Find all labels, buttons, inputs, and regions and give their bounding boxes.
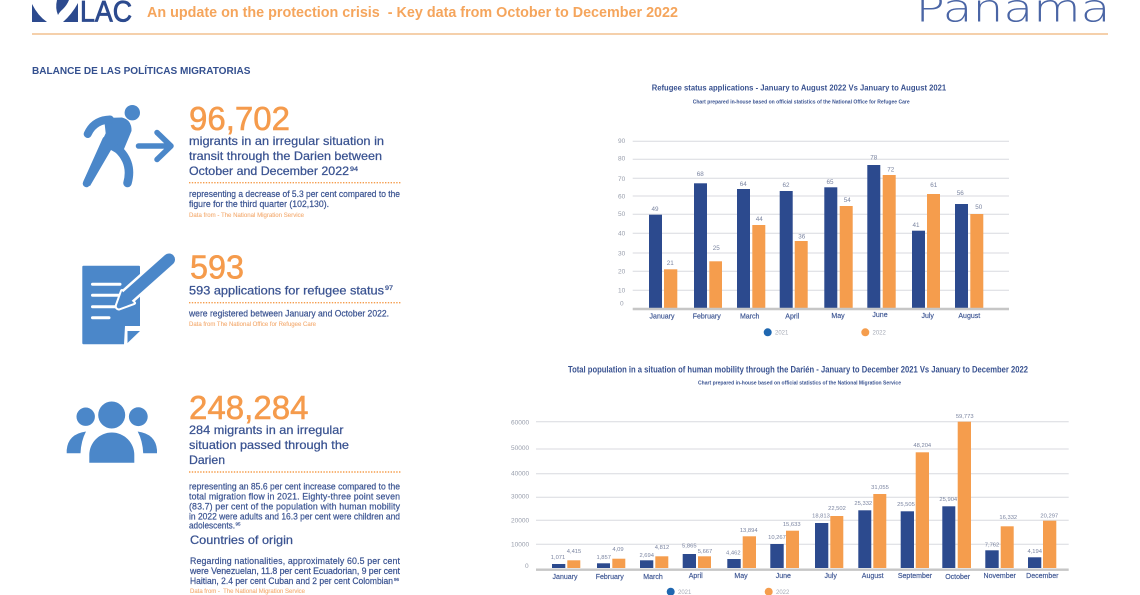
icon: group of people (67, 402, 157, 463)
header title: An update on the protection crisis - Key data from October to December 2022 (147, 5, 678, 21)
header rule (32, 33, 1108, 35)
chart title: Refugee status applications - January to August 2022 Vs January to August 2021 (652, 84, 947, 92)
y axis labels: 40000 (511, 470, 529, 477)
value labels: 4,812 (655, 545, 669, 551)
lead text: October and December 2022 (189, 164, 349, 178)
y axis labels: 10000 (511, 541, 529, 548)
value labels: 25,505 (897, 502, 915, 508)
value labels: 7,762 (985, 542, 999, 548)
y axis labels: 20000 (511, 518, 529, 525)
value labels: 25,904 (939, 497, 958, 503)
bar chart: total population in human mobility (511, 364, 1069, 595)
value labels: 49 (651, 206, 659, 213)
description: representing an 85.6 per cent increase compared to the (189, 481, 400, 491)
month labels: January (650, 314, 675, 321)
lead text: Darien (189, 453, 225, 467)
icon: document and pen (82, 260, 169, 344)
month labels: July (921, 313, 934, 320)
month labels: February (596, 574, 624, 581)
chart title: Total population in a situation of human mobility through the Darién - January to December 2021 Vs January to December 2022 (568, 364, 1028, 374)
value labels: 64 (740, 181, 747, 188)
lead text (189, 134, 384, 178)
legend (667, 588, 790, 595)
description: adolescents. (189, 521, 235, 531)
value labels: 72 (887, 166, 895, 174)
description: (83.7) per cent of the population with human mobility (189, 501, 401, 511)
big number: 248,284 (189, 389, 308, 426)
month labels: September (898, 573, 933, 580)
description: representing a decrease of 5.3 per cent compared to the (189, 189, 400, 199)
lead text: situation passed through the (189, 438, 349, 452)
value labels: 50 (975, 204, 983, 211)
value labels: 13,894 (740, 528, 758, 534)
month labels: March (643, 574, 663, 581)
value labels: 48,204 (913, 443, 932, 449)
month labels: December (1026, 573, 1059, 580)
chart subtitle: Chart prepared in-house based on official statistics of the National Office for Refugee Care (693, 99, 910, 105)
value labels: 5,865 (682, 543, 697, 549)
nationalities text: Regarding nationalities, approximately 60.5 per cent (190, 556, 401, 566)
subheading: countries of origin: Countries of origin (190, 533, 293, 547)
month labels: April (689, 573, 703, 580)
lead text: 97 (385, 286, 394, 292)
big number: 96,702 (189, 100, 290, 137)
value labels: 59,773 (956, 414, 974, 420)
legend: 2022 (872, 330, 887, 336)
month labels: April (785, 314, 800, 321)
value labels: 62 (782, 182, 790, 189)
month labels (650, 312, 980, 321)
value labels: 4,415 (567, 549, 581, 555)
value labels: 5,667 (698, 549, 712, 555)
month labels: November (984, 573, 1017, 580)
value labels (551, 414, 1058, 561)
value labels: 1,071 (551, 555, 565, 561)
value labels: 1,857 (596, 555, 611, 561)
lead text (189, 423, 349, 467)
month labels: March (740, 314, 760, 321)
bar chart: refugee status applications (618, 84, 1009, 336)
y axis labels: 20 (618, 269, 626, 276)
month labels: May (734, 573, 748, 580)
month labels: June (872, 312, 888, 319)
bars (649, 165, 983, 308)
y axis labels (618, 138, 626, 308)
value labels: 16,332 (999, 515, 1017, 521)
y axis labels: 0 (620, 301, 624, 308)
month labels: August (958, 313, 980, 320)
month labels: October (945, 574, 971, 581)
value labels: 22,502 (828, 506, 846, 512)
lead text: 593 applications for refugee status (189, 283, 384, 297)
value labels: 68 (697, 171, 704, 178)
month labels: August (862, 573, 884, 580)
month labels: June (776, 573, 791, 580)
legend: 2021 (775, 330, 789, 336)
panel: migrants through the Darien (67, 389, 401, 595)
value labels: 44 (756, 216, 763, 223)
value labels: 20,297 (1040, 513, 1058, 519)
lead text: 284 migrants in an irregular (189, 423, 344, 437)
nationalities text: 96 (394, 577, 400, 582)
big number: 593 (190, 248, 244, 285)
value labels: 61 (930, 182, 938, 189)
y axis labels (511, 420, 529, 570)
value labels: 15,633 (783, 522, 801, 528)
source: Data from - The National Migration Service (189, 213, 305, 219)
value labels: 4,194 (1027, 549, 1043, 555)
y axis labels: 0 (525, 563, 529, 570)
y axis labels: 60 (618, 193, 626, 200)
value labels: 65 (826, 179, 834, 186)
value labels (651, 154, 983, 267)
bars (552, 422, 1056, 568)
value labels: 25 (713, 245, 720, 252)
section heading: BALANCE DE LAS POLÍTICAS MIGRATORIAS (32, 64, 250, 77)
month labels: May (831, 313, 845, 320)
y axis labels: 30 (618, 250, 626, 257)
month labels (553, 573, 1059, 581)
value labels: 56 (957, 190, 964, 197)
nationalities text: Haitian, 2.4 per cent Cuban and 2 per cent Colombian (190, 576, 393, 586)
y axis labels: 50 (618, 211, 626, 218)
header (32, 0, 1110, 34)
y axis labels: 70 (618, 176, 626, 183)
value labels: 18,813 (812, 513, 830, 519)
y axis labels: 40 (618, 231, 626, 238)
month labels: January (553, 574, 578, 581)
lead text: 94 (350, 167, 359, 173)
lead text: transit through the Darien between (189, 149, 382, 163)
icon: running person with arrow (83, 105, 171, 186)
panel: refugee applications (82, 248, 401, 344)
panel: migrants in transit (83, 100, 401, 219)
description (189, 481, 401, 531)
description: in 2022 were adults and 16.3 per cent were children and (189, 511, 400, 521)
value labels: 10,267 (768, 535, 786, 541)
description: 95 (236, 522, 241, 526)
value labels: 4,09 (612, 547, 624, 553)
y axis labels: 30000 (511, 494, 529, 501)
value labels: 31,055 (871, 485, 889, 491)
month labels: July (824, 573, 837, 580)
value labels: 21 (667, 260, 674, 267)
chart subtitle: Chart prepared in-house based on official statistics of the National Migration Service (698, 381, 901, 387)
value labels: 25,332 (854, 501, 872, 507)
description: figure for the third quarter (102,130). (189, 199, 329, 209)
value labels: 4,462 (726, 550, 741, 556)
source: Data from - The National Migration Service (190, 589, 306, 595)
y axis labels: 80 (618, 156, 626, 163)
value labels: 54 (844, 197, 851, 204)
description: were registered between January and October 2022. (188, 308, 389, 318)
description: total migration flow in 2021. Eighty-three point seven (189, 491, 400, 501)
y axis labels: 90 (618, 138, 626, 145)
source: Data from The National Office for Refugee Care (189, 322, 317, 328)
value labels: 78 (870, 154, 878, 162)
y axis labels: 60000 (511, 420, 529, 426)
month labels: February (693, 314, 721, 321)
description (189, 189, 400, 209)
value labels: 36 (798, 234, 806, 240)
legend (764, 328, 887, 336)
lead text: migrants in an irregular situation in (189, 134, 384, 148)
y axis labels: 50000 (511, 445, 529, 452)
nationalities text (189, 556, 401, 586)
logo (32, 0, 132, 29)
nationalities text: were Venezuelan, 11.8 per cent Ecuadorian, 9 per cent (189, 566, 401, 576)
value labels: 2,694 (639, 553, 655, 559)
value labels: 41 (912, 222, 920, 229)
y axis labels: 10 (618, 288, 626, 295)
